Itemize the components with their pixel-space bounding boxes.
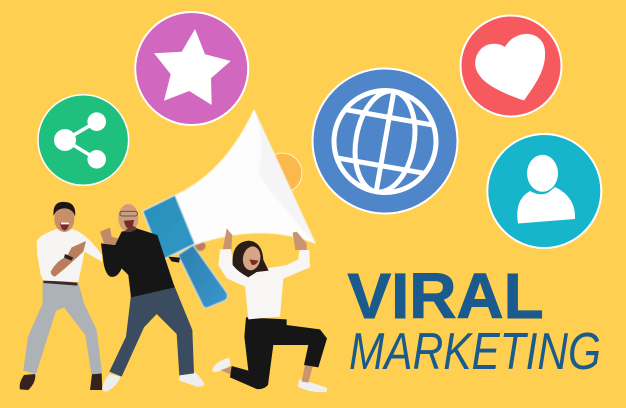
person: man in white shirt bbox=[20, 202, 102, 390]
legs skin bbox=[221, 365, 313, 383]
icon: user bbox=[487, 134, 601, 248]
shoes bbox=[212, 358, 327, 392]
head bbox=[54, 207, 74, 232]
icon: share bbox=[38, 95, 129, 185]
belt bbox=[43, 280, 77, 286]
megaphone cone bbox=[175, 109, 316, 245]
raised arms bbox=[223, 228, 307, 251]
shirt bbox=[218, 249, 310, 319]
icon: heart bbox=[460, 16, 562, 116]
icon: globe bbox=[312, 68, 458, 214]
sweater bbox=[101, 229, 175, 297]
jeans bbox=[109, 285, 194, 377]
shoes bbox=[102, 371, 205, 392]
face bbox=[241, 245, 262, 272]
orange circle behind megaphone bbox=[262, 153, 302, 193]
hand on megaphone bbox=[194, 241, 206, 251]
fist bbox=[100, 228, 118, 245]
megaphone blue body bbox=[142, 195, 195, 260]
hair bbox=[233, 241, 269, 277]
person: bald man in black sweater bbox=[100, 204, 205, 392]
shoes bbox=[20, 373, 102, 390]
title bbox=[348, 260, 601, 381]
title: viral: VIRAL bbox=[348, 260, 544, 332]
megaphone bbox=[142, 109, 316, 308]
head bbox=[118, 204, 138, 232]
icon: star bbox=[135, 12, 248, 125]
arm bbox=[51, 241, 86, 277]
trousers bbox=[23, 282, 102, 374]
trousers bbox=[230, 317, 327, 389]
shirt bbox=[37, 228, 102, 282]
megaphone handle bbox=[178, 245, 228, 308]
person: woman kneeling bbox=[212, 228, 327, 392]
